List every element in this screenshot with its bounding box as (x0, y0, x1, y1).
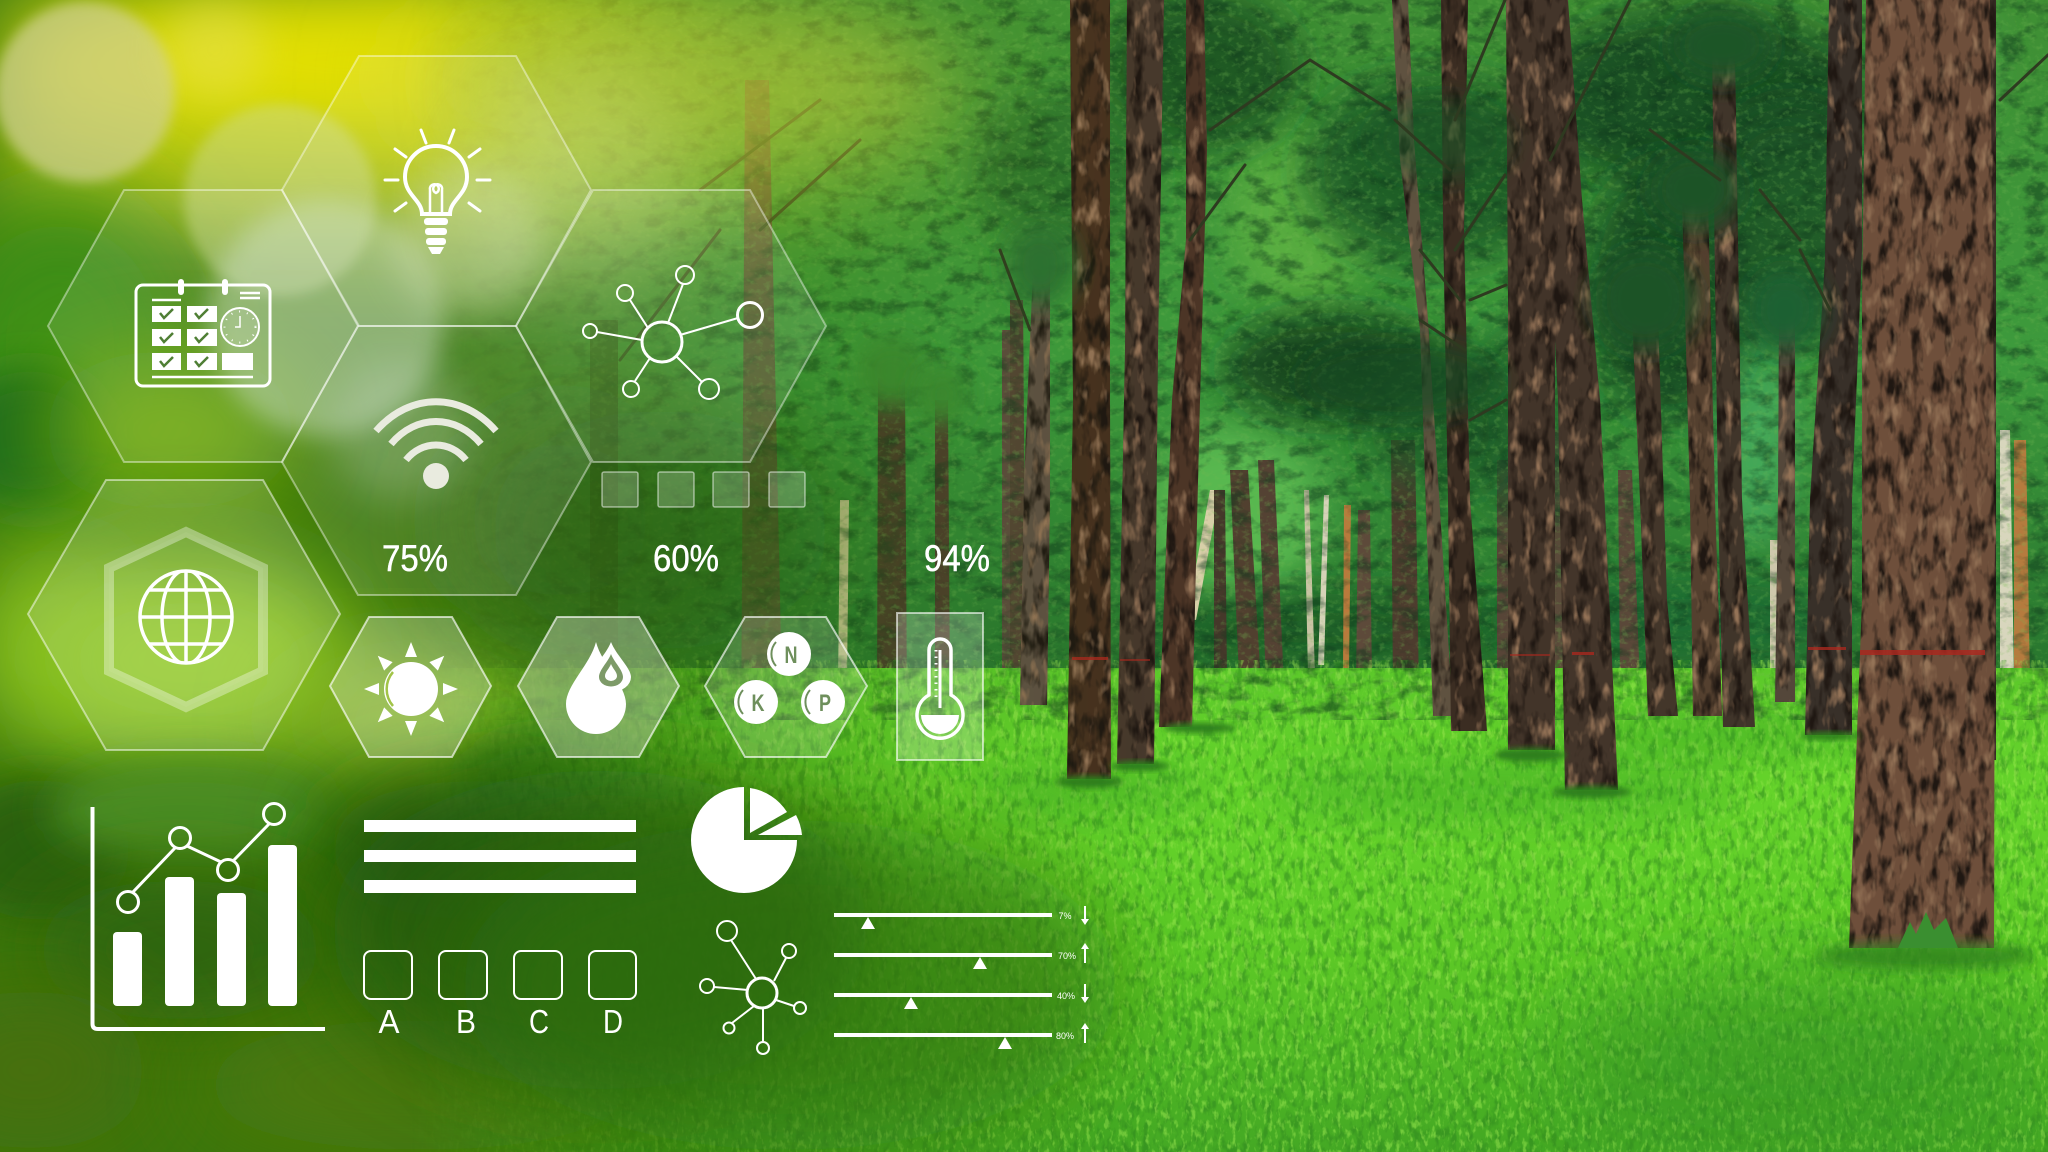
tree bases and ivy (1055, 723, 2035, 970)
icon: lightbulb (385, 130, 490, 254)
icon: network nodes (583, 266, 762, 399)
grass floor (0, 660, 2048, 1152)
slider: 80 percent: 80% (1056, 1031, 1074, 1041)
icon: small network (700, 921, 806, 1054)
slider: 70 percent: 70% (1058, 951, 1076, 961)
panel: wifi hexagon (282, 326, 591, 595)
option boxes A B C D: D (603, 1003, 623, 1040)
needle clusters over trunk tops (856, 9, 1821, 425)
icon: sun (364, 642, 458, 736)
panel: calendar hexagon (48, 190, 358, 462)
panel: lightbulb hexagon (282, 56, 591, 326)
icon: N nutrient (767, 632, 811, 676)
haze: sunlit top band (480, 5, 960, 175)
slider: 80 percent (834, 1023, 1089, 1049)
pine branches (620, 0, 2048, 420)
panel: network hexagon (516, 190, 826, 462)
overlay: yellow-green bokeh fade (0, 0, 1014, 1152)
label: 75 percent: 75% (382, 538, 448, 579)
chart trend line (118, 804, 284, 912)
canopy masses (0, 0, 2048, 720)
chart axes (92, 807, 325, 1029)
haze: dark lower middle (330, 770, 870, 1090)
label: 94 percent: 94% (924, 538, 990, 579)
option boxes A B C D: C (529, 1003, 549, 1040)
indicator squares (602, 472, 805, 507)
icon: wifi signal (376, 402, 496, 489)
icon: thermometer (917, 639, 963, 738)
slider: 7 percent (834, 906, 1089, 929)
label: 60 percent: 60% (653, 538, 719, 579)
icon: water drops (566, 642, 631, 734)
icon: K nutrient: K (752, 690, 765, 717)
icon: P nutrient: P (819, 690, 831, 717)
panel: nutrient hexagon (705, 617, 867, 757)
icon: P nutrient (801, 680, 845, 724)
option boxes A B C D: A (378, 1003, 400, 1040)
slider: 40 percent (834, 984, 1089, 1009)
haze: dark behind wifi hexagon (490, 410, 830, 650)
sliders (834, 906, 1089, 1049)
icon: N nutrient: N (784, 642, 798, 669)
foliage backdrop (0, 0, 2048, 720)
chart: pie (691, 787, 802, 893)
icon: globe (132, 570, 240, 664)
chart bars (113, 845, 297, 1006)
icon: calendar with checks and clock (136, 279, 270, 386)
panel: thermometer card (897, 613, 983, 760)
main pine trunks (1020, 0, 1996, 948)
slider: 40 percent: 40% (1057, 991, 1075, 1001)
inner hexagon ring (109, 532, 263, 707)
chart: bars with trend line (92, 804, 325, 1029)
red survey bands (1072, 647, 1985, 661)
option boxes A B C D (364, 951, 636, 1040)
panel: globe hexagon (28, 480, 340, 750)
slider: 7 percent: 7% (1058, 911, 1072, 921)
distant pale and dark trunks (590, 80, 2030, 740)
lens flare discs (0, 0, 690, 500)
panel: water hexagon (518, 617, 679, 757)
text placeholder lines (364, 820, 636, 893)
slider: 70 percent (834, 943, 1089, 969)
option boxes A B C D: B (456, 1003, 476, 1040)
icon: K nutrient (734, 680, 778, 724)
lower-left extension of the fade over the grass (460, 820, 1120, 1150)
panel: sunlight hexagon (330, 617, 491, 757)
